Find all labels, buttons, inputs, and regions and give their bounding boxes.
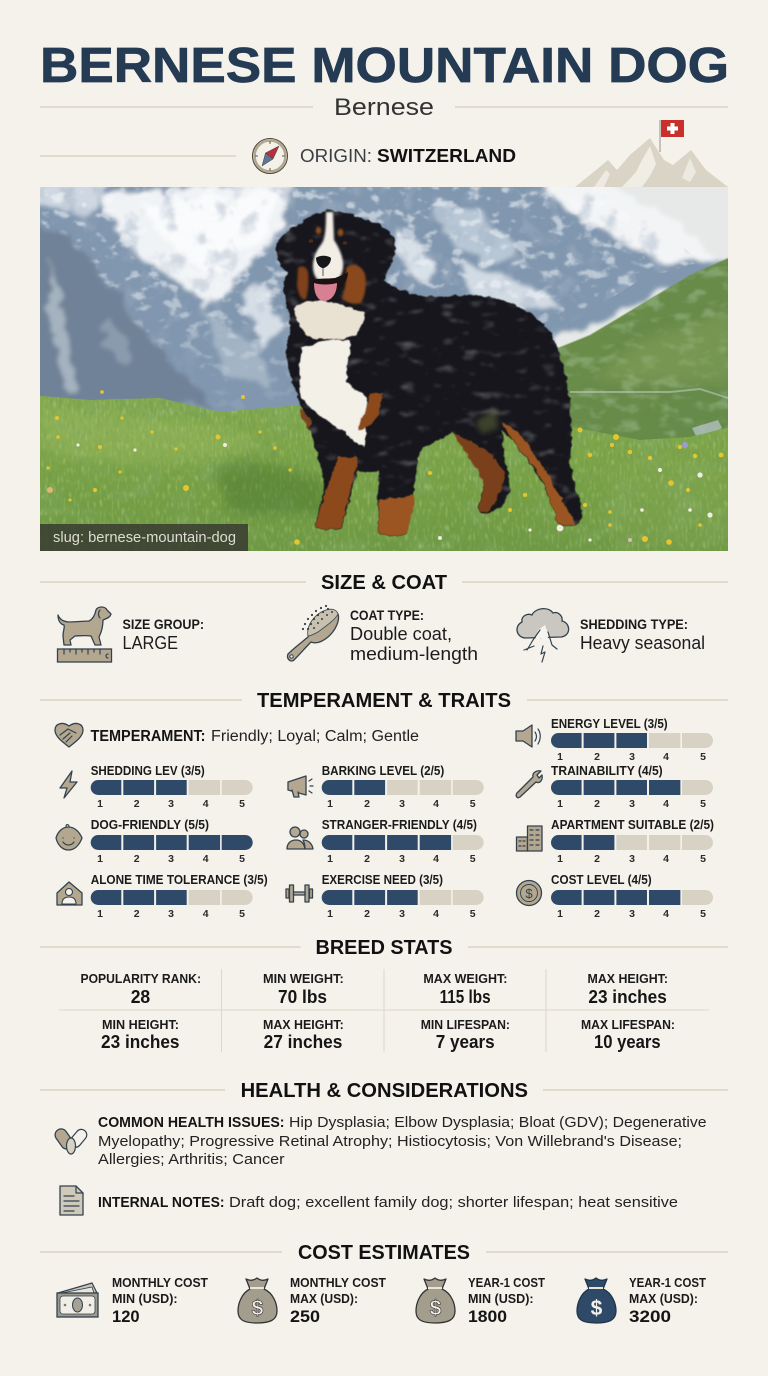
icon: mountain with Swiss flag: [575, 120, 728, 187]
stat: min height: MIN HEIGHT:: [102, 1017, 179, 1032]
icon: wrench: [516, 771, 542, 798]
icon: shedding cloud: [517, 609, 569, 662]
dog face: [297, 212, 366, 304]
icon: money bag navy: [577, 1278, 616, 1323]
common health issues text: Hip Dysplasia; Elbow Dysplasia; Bloat (GDV); Degenerative: [289, 1114, 706, 1131]
rating: alone time tolerance: 1: [97, 908, 103, 920]
rating: exercise need: 5: [470, 908, 476, 920]
rating: alone time tolerance: [91, 873, 268, 920]
internal notes text: Draft dog; excellent family dog; shorter lifespan; heat sensitive: [229, 1194, 678, 1211]
rating: apartment suitable: 4: [663, 853, 669, 865]
rating: shedding level: 5: [239, 798, 245, 810]
cost: monthly min: MIN (USD):: [112, 1291, 178, 1306]
common health issues text: Allergies; Arthritis; Cancer: [98, 1151, 285, 1168]
cost: monthly max: MONTHLY COST: [290, 1275, 386, 1290]
temperament text: Friendly; Loyal; Calm; Gentle: [211, 728, 419, 745]
rating: apartment suitable: 3: [629, 853, 635, 865]
icon: money bag 2: [416, 1278, 455, 1323]
cost: monthly min: [112, 1275, 208, 1326]
rating: trainability: TRAINABILITY (4/5): [551, 764, 663, 778]
shedding type: [580, 617, 705, 653]
cost: monthly max: MAX (USD):: [290, 1291, 358, 1306]
hero photo: Bernese mountain dog in alpine meadow: [28, 175, 738, 560]
rating: stranger-friendly: [322, 818, 484, 865]
coat type: medium-length: [350, 644, 478, 664]
mountains and snow: [30, 175, 725, 420]
icon: dumbbell: [286, 885, 312, 902]
cost: year-1 min: YEAR-1 COST: [468, 1275, 545, 1290]
cost: monthly min: 120: [112, 1307, 140, 1326]
icon: coin: [516, 880, 542, 906]
cost: year-1 max: 3200: [629, 1307, 671, 1326]
cost: year-1 min: 1800: [468, 1307, 507, 1326]
cost: monthly max: 250: [290, 1307, 320, 1326]
rating: energy level: 5: [700, 751, 706, 763]
rating: dog-friendly: 1: [97, 853, 103, 865]
rating: shedding level: 4: [203, 798, 209, 810]
rating: dog-friendly: 2: [134, 853, 140, 865]
rating: shedding level: 1: [97, 798, 103, 810]
heading: size & coat: SIZE & COAT: [321, 572, 447, 594]
rating: stranger-friendly: 4: [433, 853, 439, 865]
rating: trainability: [551, 764, 713, 810]
icon: dog on ruler: [58, 607, 112, 662]
rating: alone time tolerance: 5: [239, 908, 245, 920]
hind belly light: [475, 408, 498, 434]
size group: SIZE GROUP:: [122, 617, 204, 632]
stat: max weight: [423, 971, 507, 1007]
rating: exercise need: [322, 873, 484, 920]
icon: speaker: [516, 725, 540, 747]
temperament text: [90, 728, 419, 745]
section: size & coat: [40, 572, 728, 664]
rating: shedding level: SHEDDING LEV (3/5): [91, 764, 205, 778]
heading: temperament & traits: TEMPERAMENT & TRAITS: [257, 690, 511, 712]
icon: baby face: [56, 825, 82, 850]
rating: cost level: 5: [700, 908, 706, 920]
cost: year-1 max: [629, 1275, 706, 1326]
icon: money bag: $: [252, 1297, 264, 1320]
rating: energy level: [551, 717, 713, 763]
rating: energy level: 3: [629, 751, 635, 763]
slug tag: slug: bernese-mountain-dog: [53, 530, 236, 546]
rating: energy level: ENERGY LEVEL (3/5): [551, 717, 668, 731]
rating: exercise need: 3: [399, 908, 405, 920]
origin text: ORIGIN:: [300, 146, 372, 166]
rating: cost level: 1: [557, 908, 563, 920]
rating: apartment suitable: 2: [594, 853, 600, 865]
common health issues text: COMMON HEALTH ISSUES:: [98, 1114, 284, 1131]
stat: max lifespan: MAX LIFESPAN:: [581, 1017, 675, 1032]
shedding type: Heavy seasonal: [580, 633, 705, 653]
rating: exercise need: 4: [433, 908, 439, 920]
common health issues text: Myelopathy; Progressive Retinal Atrophy; Histiocytosis; Von Willebrand's Disease;: [98, 1133, 682, 1150]
subtitle: Bernese: [334, 94, 434, 121]
rating: shedding level: 3: [168, 798, 174, 810]
rating: energy level: 2: [594, 751, 600, 763]
rating: trainability: 3: [629, 798, 635, 810]
rating: barking level: BARKING LEVEL (2/5): [322, 764, 444, 778]
shedding type: SHEDDING TYPE:: [580, 617, 688, 632]
stat: max height: 23 inches: [588, 987, 667, 1007]
size group: LARGE: [122, 633, 178, 653]
title: BERNESE MOUNTAIN DOG: [40, 39, 729, 93]
rating: barking level: [322, 764, 484, 810]
stat: max weight: MAX WEIGHT:: [423, 971, 507, 986]
rating: alone time tolerance: ALONE TIME TOLERANCE (3/5): [91, 873, 268, 887]
rating: cost level: 3: [629, 908, 635, 920]
rating: exercise need: 1: [327, 908, 333, 920]
section: health & considerations: [40, 1080, 728, 1215]
stat: max height 2: [263, 1017, 344, 1052]
stat: max height 2: 27 inches: [264, 1032, 342, 1052]
icon: coin: $: [525, 886, 533, 901]
rating: cost level: 2: [594, 908, 600, 920]
cost: monthly max: [290, 1275, 386, 1326]
origin text: [300, 146, 516, 166]
rating: alone time tolerance: 4: [203, 908, 209, 920]
icon: money bag 2: $: [430, 1297, 442, 1320]
rating: stranger-friendly: 1: [327, 853, 333, 865]
stat: min weight: MIN WEIGHT:: [263, 971, 344, 986]
rating: stranger-friendly: 3: [399, 853, 405, 865]
icon: money bag navy: $: [591, 1297, 603, 1320]
common health issues text: [98, 1114, 706, 1168]
cost: year-1 min: MIN (USD):: [468, 1291, 534, 1306]
rating: apartment suitable: 5: [700, 853, 706, 865]
rating: stranger-friendly: STRANGER-FRIENDLY (4/5): [322, 818, 477, 832]
rating: shedding level: [91, 764, 253, 810]
icon: lightning: [60, 771, 77, 798]
stat: max height 2: MAX HEIGHT:: [263, 1017, 344, 1032]
rating: dog-friendly: [91, 818, 253, 865]
heading: cost estimates: COST ESTIMATES: [298, 1242, 470, 1264]
rating: dog-friendly: 3: [168, 853, 174, 865]
size group: [122, 617, 204, 653]
rating: dog-friendly: DOG-FRIENDLY (5/5): [91, 818, 209, 832]
left mountain: [28, 222, 215, 405]
rating: trainability: 2: [594, 798, 600, 810]
temperament text: TEMPERAMENT:: [90, 728, 206, 745]
origin text: SWITZERLAND: [377, 146, 516, 166]
stat: min lifespan: MIN LIFESPAN:: [421, 1017, 510, 1032]
coat type: Double coat,: [350, 624, 452, 644]
stat: min lifespan: [421, 1017, 510, 1052]
rating: cost level: COST LEVEL (4/5): [551, 873, 652, 887]
rating: apartment suitable: APARTMENT SUITABLE (2/5): [551, 818, 714, 832]
section: temperament & traits: [40, 690, 728, 920]
icon: dog house: [57, 882, 82, 905]
stat: min weight: [263, 971, 344, 1007]
rating: exercise need: EXERCISE NEED (3/5): [322, 873, 443, 887]
rating: barking level: 1: [327, 798, 333, 810]
rating: barking level: 2: [364, 798, 370, 810]
rating: stranger-friendly: 2: [364, 853, 370, 865]
icon: heart handshake: [55, 723, 83, 747]
rating: apartment suitable: [551, 818, 714, 865]
icon: grooming brush: [288, 605, 339, 661]
internal notes text: INTERNAL NOTES:: [98, 1194, 224, 1211]
right green hill: [557, 258, 728, 440]
icon: people: [287, 827, 313, 849]
stat: popularity rank: [80, 971, 201, 1007]
dog: [276, 211, 582, 536]
stat: max lifespan: [581, 1017, 675, 1052]
slug tag: [40, 524, 248, 551]
section: cost estimates: [40, 1242, 728, 1326]
meadow: [30, 395, 738, 560]
header block: [40, 39, 729, 187]
rating: energy level: 4: [663, 751, 669, 763]
section: breed stats: [40, 937, 728, 1052]
icon: apartment building: [516, 826, 542, 851]
icon: banknotes: [57, 1283, 98, 1317]
stat: max lifespan: 10 years: [594, 1032, 661, 1052]
icon: money bag: [238, 1278, 277, 1323]
rating: cost level: [551, 873, 713, 920]
rating: dog-friendly: 4: [203, 853, 209, 865]
fur sheen: [275, 210, 585, 540]
rating: barking level: 5: [470, 798, 476, 810]
heading: health & considerations: HEALTH & CONSIDERATIONS: [241, 1080, 528, 1102]
stat: popularity rank: POPULARITY RANK:: [80, 971, 201, 986]
rating: alone time tolerance: 3: [168, 908, 174, 920]
stat: max height: MAX HEIGHT:: [588, 971, 668, 986]
stat: max weight: 115 lbs: [440, 987, 491, 1007]
rating: stranger-friendly: 5: [470, 853, 476, 865]
icon: compass: [252, 138, 288, 174]
rating: exercise need: 2: [364, 908, 370, 920]
rating: cost level: 4: [663, 908, 669, 920]
coat type: [350, 608, 478, 664]
heading: breed stats: BREED STATS: [316, 937, 452, 959]
icon: document: [60, 1186, 83, 1215]
rating: energy level: 1: [557, 751, 563, 763]
stat: max height: [588, 971, 668, 1007]
cost: year-1 min: [468, 1275, 545, 1326]
stat: min height: 23 inches: [101, 1032, 180, 1052]
rating: dog-friendly: 5: [239, 853, 245, 865]
rating: shedding level: 2: [134, 798, 140, 810]
stat: min weight: 70 lbs: [278, 987, 327, 1007]
cost: year-1 max: MAX (USD):: [629, 1291, 698, 1306]
cost: year-1 max: YEAR-1 COST: [629, 1275, 706, 1290]
rating: barking level: 4: [433, 798, 439, 810]
icon: pills: [53, 1127, 89, 1154]
wildflowers: [46, 390, 723, 545]
icon: megaphone: [288, 776, 313, 797]
stat: min lifespan: 7 years: [436, 1032, 495, 1052]
stat: popularity rank: 28: [131, 987, 150, 1007]
coat type: COAT TYPE:: [350, 608, 424, 623]
rating: trainability: 5: [700, 798, 706, 810]
rating: alone time tolerance: 2: [134, 908, 140, 920]
tan legs, white bib and chest: [295, 301, 576, 536]
rating: barking level: 3: [399, 798, 405, 810]
stat: min height: [101, 1017, 180, 1052]
cost: monthly min: MONTHLY COST: [112, 1275, 208, 1290]
rating: apartment suitable: 1: [557, 853, 563, 865]
rating: trainability: 4: [663, 798, 669, 810]
rating: trainability: 1: [557, 798, 563, 810]
